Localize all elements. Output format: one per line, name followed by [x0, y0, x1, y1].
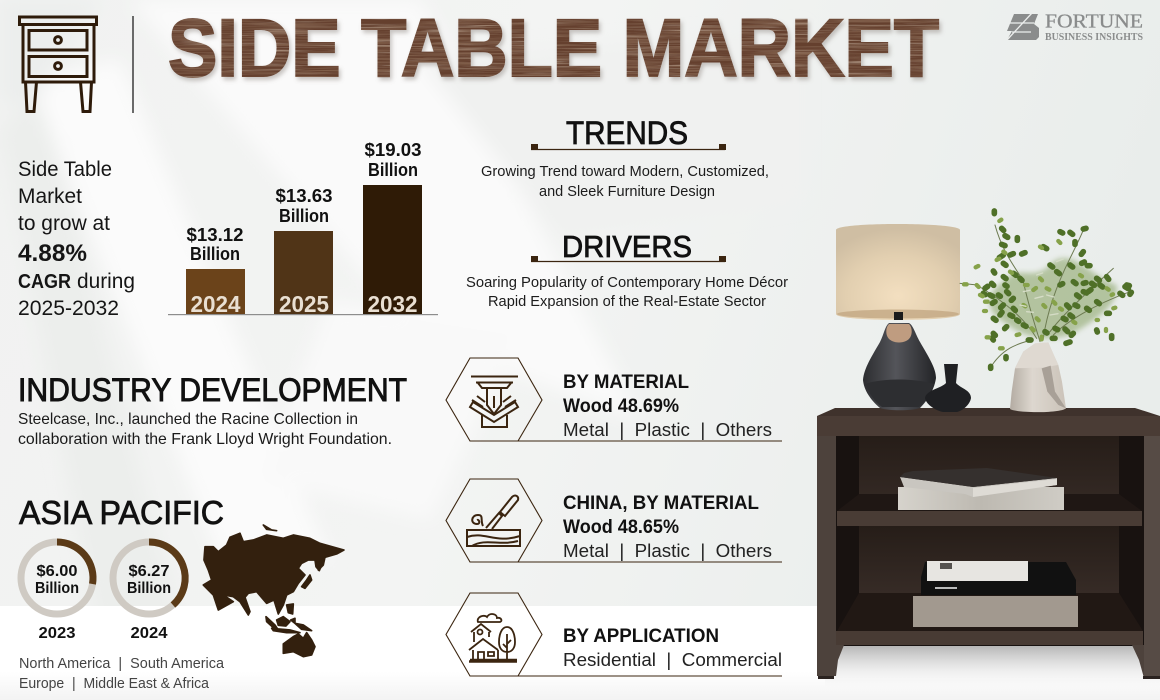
title: SIDE TABLE MARKET: [168, 3, 939, 94]
segment: china by material: [446, 479, 782, 562]
bar 2025: Billion: [279, 205, 329, 226]
icon: house and tree: [469, 614, 517, 662]
application text: BY APPLICATION: [563, 625, 719, 647]
donut 2023: 2023: [38, 625, 76, 642]
CAGR text block: Side Table: [18, 157, 112, 181]
books upper shelf: [898, 468, 1064, 510]
bar 2032: Billion: [368, 159, 418, 180]
logo mark: [1007, 13, 1039, 40]
drivers text: Soaring Popularity of Contemporary Home Décor: [466, 274, 788, 291]
china text: [563, 492, 772, 561]
drivers text: Rapid Expansion of the Real-Estate Sector: [488, 293, 766, 310]
bar 2025: 2025: [279, 291, 329, 317]
floor shadow: [825, 645, 1160, 687]
material text: [563, 371, 772, 440]
CAGR text block: 2025-2032: [18, 296, 119, 320]
industry text: [18, 411, 392, 448]
donut 2024: [113, 542, 185, 642]
china text: Metal | Plastic | Others: [563, 540, 772, 561]
donut 2023: $6.00: [36, 563, 78, 580]
material text: Wood 48.69%: [563, 395, 679, 417]
industry text: collaboration with the Frank Lloyd Wright Foundation.: [18, 431, 392, 448]
industry development: [18, 372, 407, 448]
CAGR text block: [18, 157, 135, 320]
bar 2024: [186, 224, 245, 317]
CAGR text block: CAGR: [18, 271, 71, 293]
logo: Fortune Business Insights: BUSINESS INSIGHTS: [1045, 32, 1143, 43]
china text: Wood 48.65%: [563, 516, 679, 538]
white vase: [1010, 342, 1066, 412]
books lower shelf: [913, 561, 1078, 627]
icon: wood plane: [467, 496, 520, 546]
segment: by application: [446, 593, 782, 676]
hexagon: application: [446, 593, 782, 676]
bar 2024: $13.12: [186, 224, 244, 245]
logo: Fortune Business Insights: [1007, 10, 1143, 43]
table top: [817, 408, 1160, 436]
bar 2032: 2032: [368, 291, 418, 317]
other regions text: Europe | Middle East & Africa: [19, 675, 210, 692]
bar chart: [168, 139, 438, 317]
donut 2024: 2024: [130, 625, 168, 642]
icon: side table: [20, 17, 96, 112]
asia pacific panel: [19, 495, 344, 692]
drivers text: [466, 274, 788, 310]
segment: by material: [446, 358, 782, 441]
asia pacific heading: ASIA PACIFIC: [19, 495, 224, 532]
donut 2023: [21, 542, 93, 642]
CAGR text block: 4.88%: [18, 240, 87, 267]
trends text: [481, 163, 769, 200]
bar 2032: [363, 139, 422, 317]
hexagon: material: [446, 358, 782, 441]
lamp shade: [836, 224, 960, 320]
small dark vase: [925, 364, 971, 412]
trends text: and Sleek Furniture Design: [539, 183, 715, 200]
application text: Residential | Commercial: [563, 649, 782, 670]
lamp: [836, 224, 960, 410]
icon: cutting machine: [470, 376, 518, 427]
table illustration: [817, 211, 1160, 687]
lamp base: [863, 323, 936, 410]
application text: [563, 625, 782, 670]
logo wordmark: FORTUNE: [1045, 10, 1143, 32]
industry text: Steelcase, Inc., launched the Racine Collection in: [18, 411, 358, 428]
material text: Metal | Plastic | Others: [563, 419, 772, 440]
CAGR text block: to grow at: [18, 211, 110, 235]
divider: [132, 16, 134, 113]
map: Asia Pacific: [203, 525, 344, 657]
trends text: Growing Trend toward Modern, Customized,: [481, 163, 769, 180]
china text: CHINA, BY MATERIAL: [563, 492, 759, 514]
donut 2024: Billion: [127, 580, 171, 597]
other regions text: North America | South America: [19, 655, 225, 672]
material text: BY MATERIAL: [563, 371, 689, 393]
drivers heading: DRIVERS: [562, 229, 692, 264]
bar 2032: $19.03: [364, 139, 422, 160]
industry heading: INDUSTRY DEVELOPMENT: [18, 372, 407, 408]
donut 2023: Billion: [35, 580, 79, 597]
bar 2025: $13.63: [276, 185, 332, 206]
drivers: [466, 229, 788, 310]
CAGR text block: during: [77, 269, 135, 293]
donut 2024: $6.27: [128, 563, 170, 580]
trends heading: TRENDS: [566, 115, 688, 151]
other regions text: [19, 655, 225, 692]
trends: [481, 115, 769, 200]
bar 2025: [274, 185, 333, 317]
hexagon: china: [446, 479, 782, 562]
CAGR text block: Market: [18, 184, 82, 208]
plant: [960, 211, 1131, 368]
bar 2024: Billion: [190, 243, 240, 264]
bar 2024: 2024: [190, 291, 241, 317]
cabinet body: [817, 436, 1160, 679]
